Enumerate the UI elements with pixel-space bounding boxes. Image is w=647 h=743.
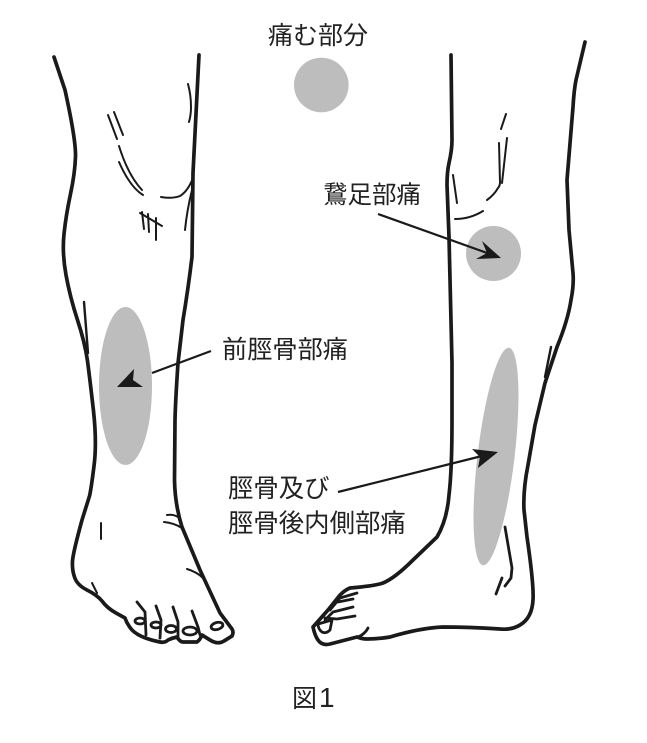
ankle creases (92, 515, 203, 593)
label: tibia and posterior medial tibia pain (228, 475, 406, 538)
arrow: to pes anserinus (378, 214, 501, 259)
label: anterior tibia pain: 前脛骨部痛 (222, 336, 348, 364)
label: pes anserinus pain: 鵞足部痛 (323, 181, 421, 209)
toenails (135, 618, 224, 635)
left leg (front view) (54, 55, 233, 643)
figure caption: 図1 (292, 682, 335, 713)
right leg (medial view) (313, 42, 585, 644)
arrow: to posterior medial tibia (338, 449, 498, 492)
arrow: to anterior tibia (117, 351, 211, 387)
legend title: 痛む部分 (268, 22, 368, 50)
label: tibia and posterior medial tibia pain: 脛骨及び (228, 475, 330, 503)
knee creases (453, 114, 507, 219)
painful area: pes anserinus (466, 226, 521, 281)
ankle creases (358, 527, 512, 637)
kneecap hatching (140, 212, 162, 240)
toes (325, 593, 357, 620)
legend swatch: painful area (294, 58, 349, 112)
big toenail (318, 620, 332, 633)
label: tibia and posterior medial tibia pain: 脛骨後内側部痛 (228, 510, 406, 538)
toes (137, 602, 200, 638)
painful area: posterior medial tibia (465, 346, 527, 567)
painful area: anterior tibia (99, 307, 152, 465)
knee creases (108, 84, 193, 230)
